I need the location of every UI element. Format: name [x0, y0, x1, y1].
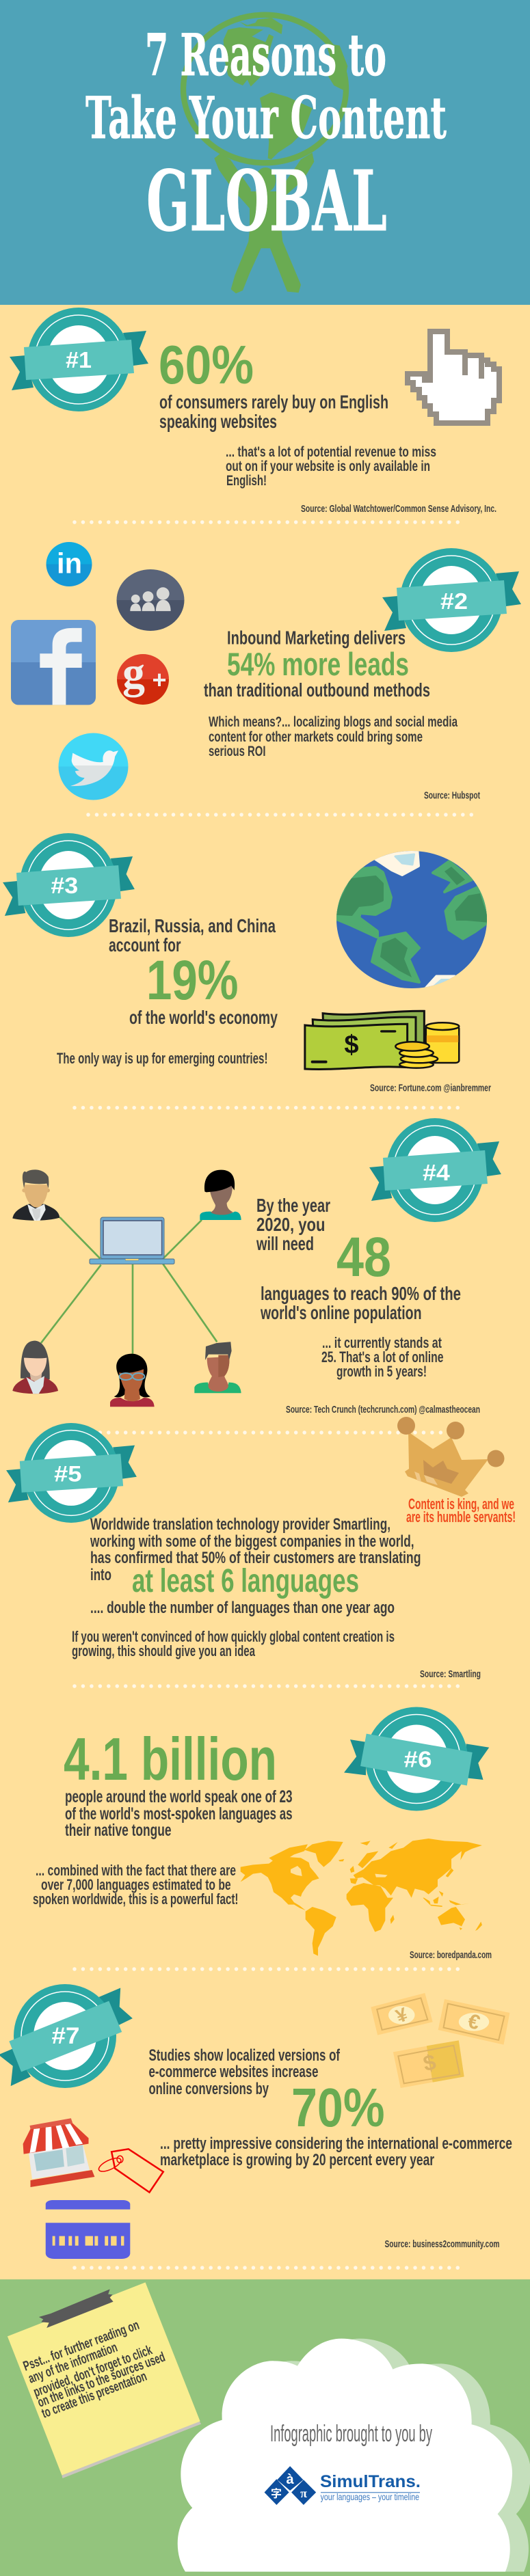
icon: crown: [397, 1417, 505, 1497]
text: 7,000 languages: ... combined with the fact that there are: [36, 1862, 236, 1879]
panel: reason 3: [3, 833, 491, 1094]
text: consumers: [159, 391, 388, 432]
text: note: on the links to the sources used: [36, 2350, 167, 2411]
text: revenue note: [226, 444, 436, 489]
logo: SimulTrans: à: [286, 2472, 294, 2487]
badge 6: #6: [403, 1747, 432, 1772]
callout: content is king: [406, 1495, 516, 1526]
text: consumers: speaking websites: [159, 411, 277, 432]
text: currently 25: 25. That's a lot of online: [321, 1348, 443, 1366]
sticky note: [8, 2282, 201, 2478]
panel: reason 6: [33, 1707, 492, 1961]
icon: storefront: [23, 2118, 94, 2187]
text: 7,000 languages: [33, 1862, 238, 1908]
text: revenue note: English!: [226, 472, 267, 489]
text: localized versions: e-commerce websites increase: [149, 2063, 319, 2081]
text: people around the world: their native tongue: [65, 1821, 172, 1840]
icon: myspace: [116, 569, 185, 631]
text: e-commerce growth: marketplace is growing by 20 percent every year: [160, 2151, 434, 2169]
icon: earth: [335, 848, 490, 991]
connector lines: [41, 1217, 217, 1354]
badge 1: #1: [66, 347, 92, 372]
text: people around the world: [65, 1787, 293, 1840]
text: note: provided, don't forget to click: [31, 2342, 155, 2400]
source 6: Source: boredpanda.com: [410, 1949, 492, 1961]
icon: money and coins: $: [344, 1031, 359, 1059]
icon: currency bills: €: [465, 2009, 483, 2035]
text: Brazil Russia China: [109, 915, 276, 955]
badge 2: [382, 548, 521, 652]
text: currently 25: growth in 5 years!: [336, 1363, 427, 1380]
badge 3: [3, 833, 135, 937]
text: smartling paragraph: [90, 1515, 421, 1584]
panel: footer: [0, 2279, 530, 2576]
network diagram: laptop and people: [12, 1169, 241, 1407]
text: by the year 2020: 2020, you: [256, 1214, 326, 1235]
cloud: [178, 2339, 530, 2572]
badge 3: #3: [51, 873, 78, 898]
icon: atlas figure holding globe: [183, 15, 347, 293]
text: double the number: .... double the number of languages than one year ago: [90, 1599, 395, 1617]
text: note: to create this presentation: [40, 2369, 149, 2422]
header panel: [0, 0, 530, 305]
title: [85, 21, 447, 250]
panel: reason 1: [10, 308, 499, 515]
icon: google plus: g: [122, 648, 145, 698]
text: ROI note: content for other markets could bring some: [209, 729, 423, 745]
text: Brazil Russia China: Brazil, Russia, and China: [109, 915, 276, 936]
text: languages online: world's online population: [260, 1302, 421, 1323]
icon: facebook: [11, 620, 96, 705]
source 5: Source: Smartling: [420, 1668, 481, 1680]
text: convinced: growing, this should give you an idea: [72, 1642, 256, 1659]
text: emerging countries: The only way is up for emerging countries!: [57, 1050, 268, 1067]
icon: woman with glasses: [110, 1354, 155, 1407]
text: 7,000 languages: spoken worldwide, this is a powerful fact!: [33, 1890, 238, 1908]
text: ROI note: [209, 714, 458, 759]
stat 19%: 19%: [146, 949, 238, 1012]
text: consumers: of consumers rarely buy on English: [159, 391, 388, 413]
badge 5: [6, 1423, 137, 1523]
text: localized versions: [149, 2046, 341, 2098]
logo: SimulTrans: SimulTrans.: [320, 2472, 421, 2491]
text: inbound marketing: than traditional outbound methods: [204, 679, 430, 701]
text: convinced: If you weren't convinced of how quickly global content creation is: [72, 1628, 395, 1645]
icon: linkedin: [47, 542, 92, 586]
text: languages online: languages to reach 90% of the: [261, 1283, 461, 1304]
text: note: Psst... for further reading on: [21, 2318, 142, 2374]
badge 7: #7: [52, 2023, 79, 2049]
icon: google plus: [117, 654, 169, 705]
logo: SimulTrans: 字: [271, 2484, 282, 2501]
badge 5: #5: [54, 1461, 82, 1487]
icon: woman with teal top: [200, 1170, 241, 1220]
icon: currency bills: [371, 1993, 509, 2088]
icon: man in green: [194, 1342, 241, 1393]
text: 7,000 languages: over 7,000 languages estimated to be: [41, 1876, 231, 1893]
text: smartling paragraph: working with some of the biggest companies in the world,: [90, 1532, 414, 1551]
text: Brazil Russia China: account for: [109, 934, 181, 955]
logo: SimulTrans: your languages – your timeline: [321, 2491, 419, 2502]
badge 6: [342, 1707, 491, 1811]
panel: reason 5: [6, 1417, 516, 1680]
logo: SimulTrans: [265, 2466, 421, 2505]
icon: currency bills: ¥: [393, 2003, 410, 2027]
text: localized versions: online conversions by: [149, 2080, 269, 2098]
text: note: any of the information: [27, 2340, 120, 2387]
icon: credit card: [46, 2200, 130, 2259]
text: revenue note: out on if your website is only available in: [226, 458, 430, 474]
text: by the year 2020: will need: [256, 1233, 314, 1254]
text: localized versions: Studies show localized versions of: [149, 2046, 341, 2065]
stat: 4.1 billion: 4.1 billion: [64, 1725, 277, 1793]
icon: money and coins: [305, 1011, 459, 1069]
badge 4: #4: [423, 1160, 450, 1185]
text: e-commerce growth: [160, 2134, 512, 2169]
icon: world map: [241, 1839, 482, 1956]
source 2: Source: Hubspot: [424, 790, 480, 801]
text: by the year 2020: [256, 1195, 330, 1254]
text: smartling paragraph: Worldwide translation technology provider Smartling,: [90, 1515, 390, 1534]
icon: google plus: +: [152, 666, 167, 694]
text: people around the world: of the world's most-spoken languages as: [65, 1804, 293, 1823]
icon: pixel hand cursor: [408, 331, 499, 423]
stat 48: 48: [336, 1226, 391, 1288]
panel: reason 7: [0, 1984, 512, 2259]
text: ROI note: serious ROI: [209, 743, 265, 759]
text: revenue note: ... that's a lot of potential revenue to miss: [226, 444, 436, 460]
icon: man in suit: [12, 1169, 59, 1221]
text: note: [21, 2318, 167, 2422]
icon: currency bills: $: [421, 2050, 438, 2076]
stat 70%: 70%: [291, 2077, 384, 2138]
stat: at least 6 languages: at least 6 languages: [132, 1563, 359, 1599]
text: currently 25: [321, 1334, 443, 1380]
panel: reason 4: [12, 1118, 501, 1415]
text: smartling paragraph: into: [90, 1566, 111, 1584]
icon: woman in red suit: [12, 1341, 58, 1394]
badge 1: [10, 308, 148, 411]
text: inbound marketing: Inbound Marketing delivers: [227, 627, 406, 649]
logo: SimulTrans: π: [300, 2486, 307, 2500]
text: people around the world: people around the world speak one of 23: [65, 1787, 293, 1806]
text: inbound marketing: [204, 627, 430, 701]
text: inbound marketing: 54% more leads: [227, 646, 409, 682]
text: smartling paragraph: has confirmed that 50% of their customers are translating: [90, 1549, 421, 1567]
badge 4: [369, 1118, 501, 1222]
icon: linkedin: in: [57, 547, 82, 580]
text: by the year 2020: By the year: [256, 1195, 330, 1216]
text: world economy: of the world's economy: [129, 1007, 278, 1028]
icon: price tag: [96, 2149, 163, 2193]
panel: reason 2: [11, 542, 521, 801]
badge 2: #2: [440, 588, 468, 614]
icon: twitter: [59, 733, 129, 800]
icon: laptop: [90, 1217, 174, 1264]
stat 60%: 60%: [159, 334, 254, 395]
badge 7: [0, 1984, 141, 2088]
text: currently 25: ... it currently stands at: [322, 1334, 442, 1351]
text: languages online: [260, 1283, 461, 1323]
text: convinced: [72, 1628, 395, 1659]
